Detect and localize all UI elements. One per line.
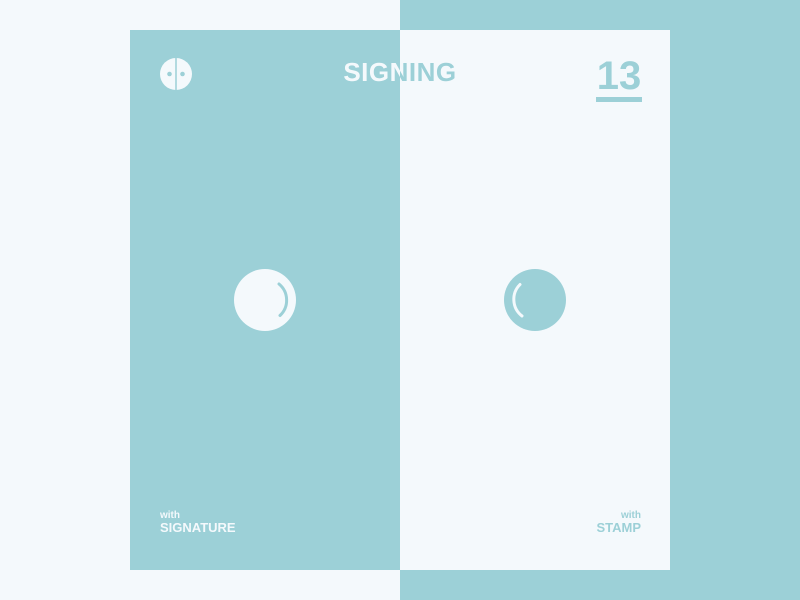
- label: with stamp: STAMP: [596, 520, 641, 535]
- icon: face logo: [160, 58, 192, 90]
- title: SIGNING: [343, 57, 457, 87]
- number badge: 13: [597, 54, 641, 98]
- label: with signature: with: [159, 510, 180, 521]
- label: with stamp: [596, 510, 641, 535]
- label: with stamp: with: [620, 510, 641, 521]
- label: with signature: [159, 510, 236, 535]
- title: [344, 62, 454, 82]
- title: SIGNING: [343, 57, 457, 87]
- panel: stamp: [400, 30, 670, 570]
- icon: stamp circle: [504, 269, 566, 331]
- icon: signature circle: [234, 269, 296, 331]
- panel: signature: [130, 30, 400, 570]
- label: with signature: SIGNATURE: [160, 520, 236, 535]
